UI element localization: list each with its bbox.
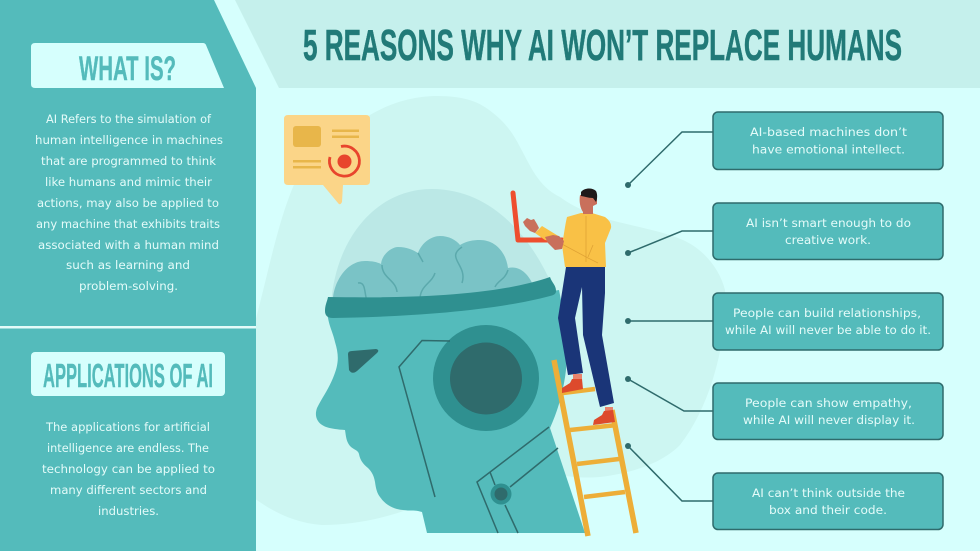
text block: definition: any machine that exhibits traits — [36, 217, 220, 231]
heading: applications of ai: APPLICATIONS OF AI — [43, 357, 213, 394]
reason 1 — [713, 112, 943, 170]
reason 4: People can show empathy, — [745, 396, 912, 410]
callout connectors — [628, 132, 713, 501]
left panel — [0, 0, 256, 551]
trousers — [558, 267, 614, 407]
person on ladder — [513, 188, 615, 425]
reason 5: box and their code. — [769, 503, 887, 517]
text block: definition: associated with a human mind — [38, 238, 219, 252]
head silhouette — [316, 290, 585, 533]
text block: applications: many different sectors and — [50, 483, 207, 497]
reason 1: have emotional intellect. — [752, 142, 905, 156]
circuit node — [490, 484, 512, 504]
icon: speech bubble — [284, 115, 370, 204]
reason 2 — [713, 203, 943, 260]
text block: applications: The applications for artificial — [45, 420, 210, 434]
shirt folds — [560, 216, 598, 263]
text block: applications: industries. — [98, 504, 159, 518]
text block: definition: AI Refers to the simulation of — [46, 112, 212, 126]
reason 1: AI-based machines don’t — [750, 125, 907, 139]
illustration: robot head — [316, 189, 585, 533]
connector dots — [625, 182, 631, 449]
ankles — [573, 374, 613, 413]
brain — [333, 236, 535, 312]
text block: applications — [42, 420, 215, 518]
reason 3: while AI will never be able to do it. — [725, 323, 931, 337]
circuit lines — [399, 340, 558, 533]
hands — [523, 218, 564, 250]
ear — [433, 325, 539, 431]
text block: definition: actions, may also be applied to — [37, 196, 219, 210]
heading: applications of ai — [31, 352, 225, 396]
tablet — [513, 193, 562, 240]
heading: what is — [31, 43, 224, 88]
text block: definition: problem-solving. — [79, 279, 178, 293]
text block: applications: technology can be applied to — [42, 462, 215, 476]
reason 5: AI can’t think outside the — [752, 486, 905, 500]
reason 4: while AI will never display it. — [743, 413, 915, 427]
hair — [581, 188, 597, 202]
reason 3: People can build relationships, — [733, 306, 921, 320]
header band — [235, 0, 980, 88]
text block: definition: such as learning and — [66, 258, 190, 272]
far arm — [535, 226, 560, 243]
heading: what is: WHAT IS? — [79, 50, 176, 88]
ladder — [554, 360, 636, 536]
torso — [562, 213, 611, 267]
band — [325, 277, 556, 318]
reason 3 — [713, 293, 943, 350]
background blob — [250, 96, 725, 525]
eye — [348, 349, 378, 373]
reason 2: AI isn’t smart enough to do — [746, 216, 911, 230]
text block: definition: like humans and mimic their — [45, 175, 212, 189]
text block: definition: human intelligence in machines — [35, 133, 223, 147]
reason 2: creative work. — [785, 233, 871, 247]
reason 5 — [713, 473, 943, 530]
shoes — [562, 379, 615, 425]
text block: applications: intelligence are endless. The — [47, 441, 209, 455]
glass dome — [331, 189, 552, 305]
text block: definition: that are programmed to think — [41, 154, 216, 168]
face — [580, 195, 597, 214]
text block: definition — [35, 112, 223, 293]
reason 4 — [713, 383, 943, 440]
